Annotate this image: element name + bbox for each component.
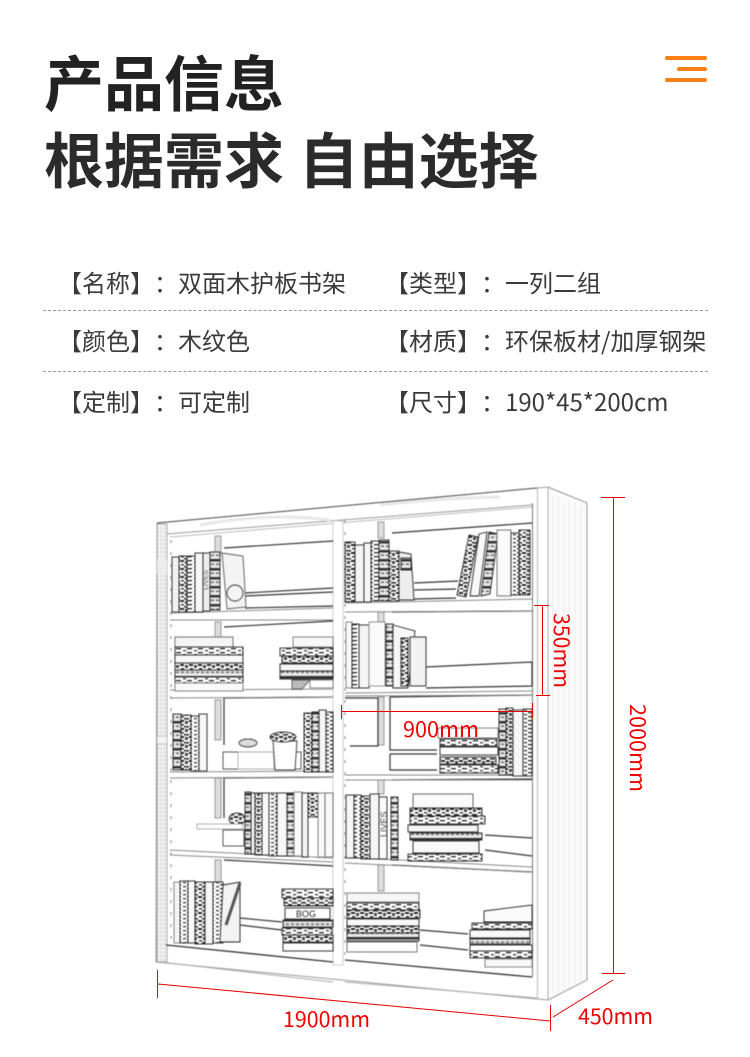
icon: orange menu	[665, 56, 707, 82]
books: left column row 5: BOG	[296, 909, 316, 919]
books: left column row 3	[173, 710, 333, 772]
books: right column row 4: LIVES	[379, 811, 389, 837]
dimension: 900mm shelf width: 900mm	[403, 714, 479, 744]
dimension: 350mm shelf height	[534, 606, 577, 696]
books: left column row 5	[174, 881, 333, 951]
centre post	[333, 521, 343, 965]
title line 1: 产品信息	[44, 37, 284, 124]
side panel	[548, 487, 587, 1000]
books: left column row 4	[197, 792, 333, 857]
dimension: 2000mm height: 2000mm	[623, 704, 653, 792]
books: right column row 1	[345, 530, 530, 602]
books: right column row 3	[438, 708, 532, 776]
dimension: 1900mm width	[158, 970, 550, 1034]
dimension: 450mm depth	[553, 980, 653, 1031]
right post	[532, 487, 548, 1000]
left column uprights	[215, 522, 384, 891]
front frame	[156, 487, 548, 1000]
books: left column row 1: LIVES	[203, 570, 210, 590]
shelf boards	[160, 599, 537, 998]
books: right column row 5	[347, 893, 532, 967]
spec: type: 【类型】：一列二组	[385, 264, 601, 299]
cabinet body	[156, 487, 587, 1000]
dimension: 450mm depth: 450mm	[578, 1001, 653, 1031]
books: right column row 2	[346, 622, 426, 688]
spec: material: 【材质】：环保板材/加厚钢架	[385, 322, 706, 357]
dimension: 1900mm width: 1900mm	[283, 1004, 370, 1034]
left mesh door edge	[157, 524, 167, 962]
side pin rows	[171, 520, 345, 960]
dimension: 2000mm height	[601, 498, 653, 974]
spec: customisation: 【定制】：可定制	[58, 383, 250, 418]
dimension: 900mm shelf width	[342, 703, 532, 744]
books: left column row 2 stacks	[175, 637, 333, 691]
books: left column row 1	[172, 552, 246, 612]
books: right column row 4	[346, 794, 485, 861]
icon: potted plants	[239, 732, 297, 770]
title line 2: 根据需求 自由选择	[44, 114, 539, 201]
spec: name: 【名称】：双面木护板书架	[58, 264, 346, 299]
top rail	[157, 488, 537, 537]
back panel lines	[224, 523, 532, 950]
dimension: 350mm shelf height: 350mm	[547, 613, 577, 688]
spec: size: 【尺寸】：190*45*200cm	[385, 383, 668, 418]
spec: colour: 【颜色】：木纹色	[58, 322, 250, 357]
